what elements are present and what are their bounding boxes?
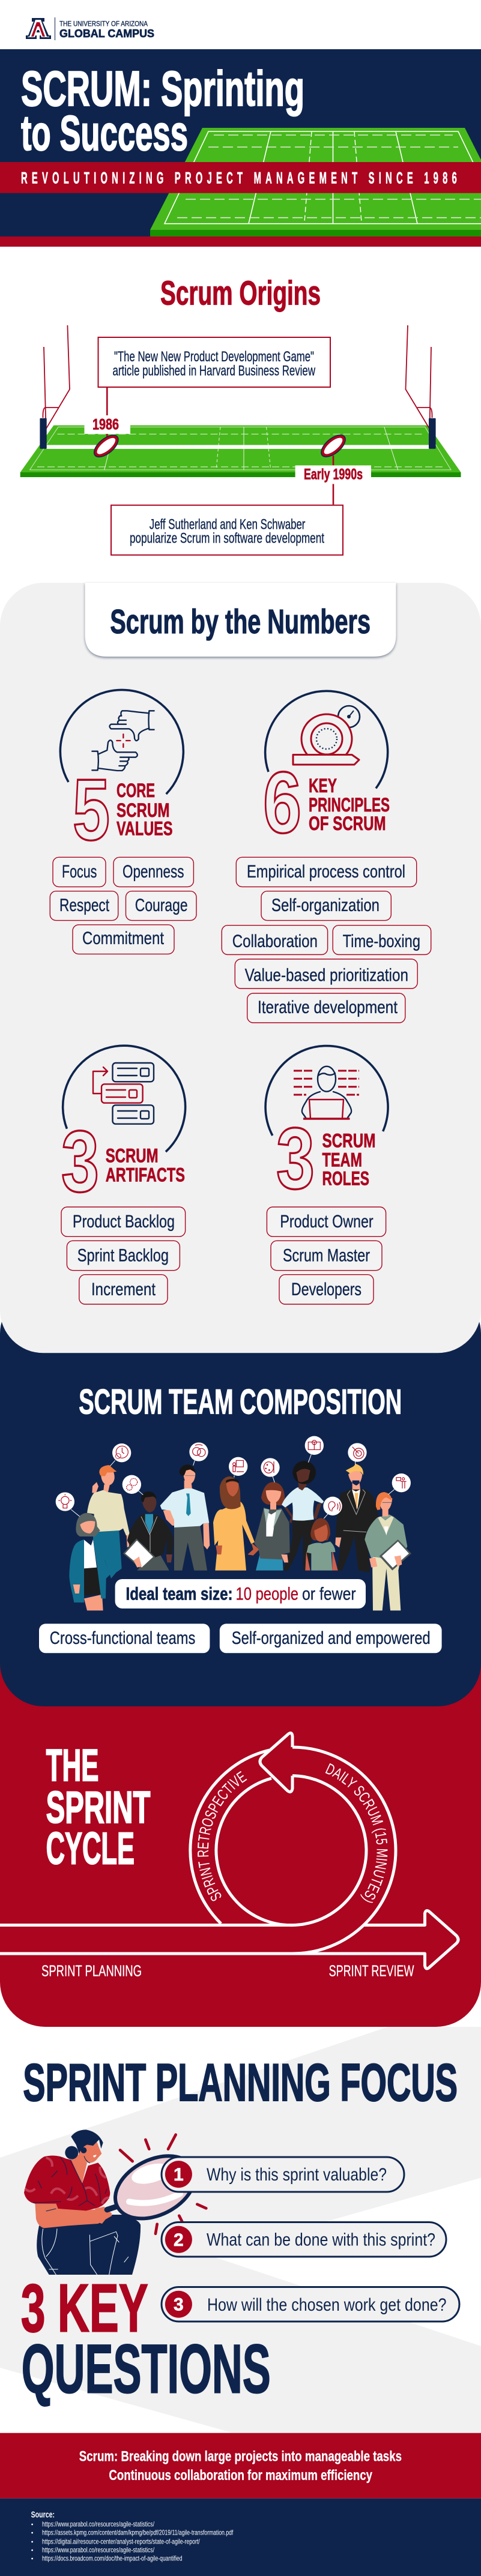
question 1: Why is this sprint valuable? [207, 2165, 387, 2185]
question 1: 1 [174, 2165, 184, 2185]
label: 1986 [84, 417, 130, 434]
label: early 1990s [295, 465, 371, 484]
pill: product owner [267, 1207, 386, 1236]
callout: 1986 article [98, 337, 330, 387]
bubble: gears [123, 1475, 141, 1494]
footer: sources: https://www.parabol.co/resources/agile-statistics/ [42, 2520, 154, 2528]
footer: sources: https://assets.kpmg.com/content/dam/kpmg/be/pdf/2019/11/agile-transformation.pdf [42, 2528, 234, 2536]
bubble: book and idea [305, 1436, 324, 1455]
question 3: 3 [174, 2295, 184, 2315]
pill: developers: Developers [291, 1280, 362, 1299]
pill: sprint backlog [67, 1241, 180, 1271]
pill: self-organized and empowered: Self-organized and empowered [232, 1628, 431, 1648]
icon: backlog boxes [93, 1063, 154, 1124]
section: the sprint cycle [0, 1732, 460, 1979]
pill: self-organization: Self-organization [271, 895, 380, 915]
person: woman in grey blazer [254, 1482, 290, 1571]
heading: questions: QUESTIONS [22, 2331, 271, 2408]
section: sprint planning focus [0, 2027, 481, 2433]
bubble: listening ear [323, 1497, 342, 1515]
pill: product backlog [61, 1207, 186, 1236]
number 3: 3 [276, 1110, 315, 1207]
label: ARTIFACTS [106, 1164, 185, 1185]
illustration: woman with magnifying glass [24, 2129, 206, 2275]
background: navy team panel [0, 1290, 481, 1706]
label: VALUES [116, 817, 173, 839]
icon: highlight rays [120, 2135, 206, 2234]
pill: respect: Respect [59, 895, 109, 915]
banner: takeaway: Scrum: Breaking down large projects into manageable tasks [79, 2449, 402, 2465]
question 2: What can be done with this sprint? [207, 2230, 435, 2250]
banner: takeaway [0, 2433, 481, 2499]
pill: increment: Increment [91, 1280, 156, 1299]
person: woman in white blouse [281, 1461, 324, 1571]
footer: sources: https://docs.broadcom.com/doc/the-impact-of-agile-quantified [42, 2554, 183, 2562]
question 2 [162, 2222, 446, 2257]
heading [46, 1740, 150, 1874]
illustration: team of ten people [56, 1436, 411, 1610]
pill: developers [279, 1275, 374, 1304]
panel: hero [0, 49, 481, 247]
bubble: teaching [392, 1473, 411, 1492]
pill: courage: Courage [135, 895, 188, 915]
person: man in black suit [335, 1464, 378, 1572]
woman's trousers [37, 2215, 141, 2275]
pill: focus [53, 857, 106, 887]
callout: 1986 article: article published in Harvard Business Review [113, 363, 315, 379]
person: man in light blue shirt [160, 1464, 210, 1571]
pill: product owner: Product Owner [280, 1212, 374, 1232]
question 1 [162, 2157, 404, 2192]
pill: value-based prioritization [235, 959, 417, 989]
label: early 1990s: Early 1990s [304, 467, 363, 483]
pill: time-boxing: Time-boxing [343, 931, 420, 951]
pill: self-organization [261, 891, 391, 921]
callout: early 1990s popularization [111, 505, 343, 555]
heading tab [85, 583, 396, 657]
wordmark: the university of arizona: THE UNIVERSITY OF ARIZONA [59, 20, 148, 28]
pill: collaboration: Collaboration [232, 931, 318, 951]
section: scrum origins [20, 274, 461, 555]
label: SCRUM [116, 799, 169, 821]
subtitle banner [0, 162, 481, 193]
label: SCRUM [322, 1130, 375, 1152]
woman's blouse [24, 2155, 110, 2211]
heading tab: Scrum by the Numbers [110, 603, 371, 641]
header: university logo [26, 17, 154, 40]
left half of the team [56, 1442, 210, 1610]
icon: magnifying glass [104, 2143, 205, 2231]
pill: openness: Openness [123, 862, 184, 882]
label: sprint planning: SPRINT PLANNING [41, 1961, 142, 1979]
bubble: target [348, 1443, 367, 1462]
person: woman in hijab [213, 1476, 259, 1571]
pill: respect [50, 891, 118, 921]
pill: time-boxing [333, 925, 431, 954]
pill: courage [126, 891, 196, 921]
label [116, 780, 173, 839]
title: to Success [21, 105, 188, 161]
icon: block A logo [26, 18, 51, 39]
right half of the team [213, 1436, 411, 1610]
person: girl in green tee [305, 1518, 338, 1571]
person: man in beige sweater [87, 1465, 130, 1578]
footer: sources: https://www.parabol.co/resources/agile-statistics/ [42, 2545, 154, 2554]
question 3 [162, 2287, 459, 2322]
section: scrum team composition [39, 1383, 442, 1653]
panel: scrum by the numbers [0, 583, 481, 1353]
label: PRINCIPLES [309, 794, 390, 816]
bubble: idea [56, 1492, 74, 1511]
pill: scrum master [271, 1241, 382, 1271]
bubble connectors [234, 1454, 395, 1518]
callout: ideal team size: or fewer [302, 1584, 356, 1604]
pill: commitment: Commitment [82, 928, 165, 948]
pill: collaboration [222, 925, 328, 954]
label: daily scrum: DAILY SCRUM (15 MINUTES) [325, 1763, 388, 1903]
bubble: presenter [229, 1457, 247, 1476]
pill: empirical process control [236, 857, 417, 887]
icon: framing hands [92, 711, 154, 771]
label: 1986: 1986 [92, 417, 119, 433]
label: KEY [309, 775, 337, 796]
pill: value-based prioritization: Value-based prioritization [245, 965, 408, 986]
bubble: art palette [261, 1458, 280, 1477]
heading: 3 key: 3 KEY [21, 2271, 148, 2346]
heading: SPRINT [46, 1782, 150, 1832]
woman's head [65, 2129, 103, 2163]
pill: focus: Focus [62, 862, 97, 882]
question 2: 2 [174, 2230, 184, 2250]
icon: developer at laptop [294, 1067, 359, 1119]
block: 5 core scrum values [50, 690, 196, 954]
woman's hand [95, 2207, 112, 2224]
label: TEAM [322, 1149, 362, 1170]
footer: sources: https://digital.ai/resource-center/analyst-reports/state-of-agile-report/ [42, 2537, 200, 2545]
footer: sources: Source: [31, 2509, 55, 2520]
icon: timed sprint loop [293, 706, 360, 765]
label: sprint review: SPRINT REVIEW [329, 1961, 414, 1979]
label [322, 1130, 375, 1189]
bubble connectors [71, 1460, 195, 1517]
heading: scrum origins: Scrum Origins [160, 274, 321, 312]
background: red sprint cycle panel [0, 1560, 481, 2027]
label: ROLES [322, 1167, 369, 1189]
block: 3 scrum team roles [265, 1046, 388, 1304]
pill: increment [79, 1275, 168, 1304]
heading: THE [46, 1740, 98, 1790]
callout: ideal team size: 10 people [235, 1584, 298, 1604]
callout: early 1990s popularization: Jeff Sutherland and Ken Schwaber [150, 516, 305, 532]
callout: early 1990s popularization: popularize Scrum in software development [130, 531, 324, 547]
callout: ideal team size: Ideal team size: [126, 1584, 233, 1604]
label: OF SCRUM [309, 813, 386, 834]
pill: commitment [73, 925, 174, 954]
title: SCRUM: Sprinting [21, 61, 304, 116]
bubble: clock and gear [112, 1443, 131, 1462]
number 5: 5 [73, 761, 110, 858]
pill: sprint backlog: Sprint Backlog [77, 1246, 169, 1266]
bubble: thinking heads [189, 1442, 208, 1461]
title [21, 61, 304, 161]
heading: CYCLE [46, 1823, 135, 1874]
person: man in black jacket [123, 1491, 174, 1571]
pill: iterative development: Iterative development [258, 998, 398, 1017]
pill: self-organized and empowered [220, 1624, 442, 1653]
pill: cross-functional teams: Cross-functional teams [50, 1628, 195, 1648]
icon: rugby ball 1990s [316, 430, 350, 462]
block: 3 scrum artifacts [61, 1046, 186, 1304]
label [309, 775, 390, 834]
callout: 1986 article: "The New New Product Development Game" [114, 349, 314, 365]
label: sprint retrospective: SPRINT RETROSPECTIVE [198, 1771, 247, 1901]
diagram: sprint loop arrow [0, 1733, 458, 1969]
woman's arm [35, 2203, 112, 2228]
pill: product backlog: Product Backlog [73, 1212, 175, 1232]
banner: takeaway: Continuous collaboration for maximum efficiency [109, 2467, 373, 2484]
block: 6 key principles [222, 691, 431, 1023]
pill: empirical process control: Empirical process control [247, 862, 405, 882]
person: woman in sage blazer [365, 1492, 411, 1610]
pill: scrum master: Scrum Master [283, 1246, 370, 1266]
label: CORE [116, 780, 155, 801]
label: SCRUM [106, 1145, 159, 1167]
pill: openness [113, 857, 193, 887]
label [106, 1145, 185, 1185]
pill: iterative development [247, 993, 405, 1023]
person: woman in teal cardigan [69, 1513, 110, 1610]
callout: ideal team size [115, 1579, 366, 1608]
pill: cross-functional teams [39, 1624, 210, 1653]
number 3: 3 [61, 1113, 99, 1210]
rugby field illustration [150, 128, 481, 236]
footer: sources [0, 2499, 481, 2576]
icon: rugby ball 1986 [89, 430, 123, 462]
number 6: 6 [263, 754, 301, 851]
wordmark: global campus: GLOBAL CAMPUS [59, 27, 154, 40]
field with goal posts [20, 325, 461, 477]
